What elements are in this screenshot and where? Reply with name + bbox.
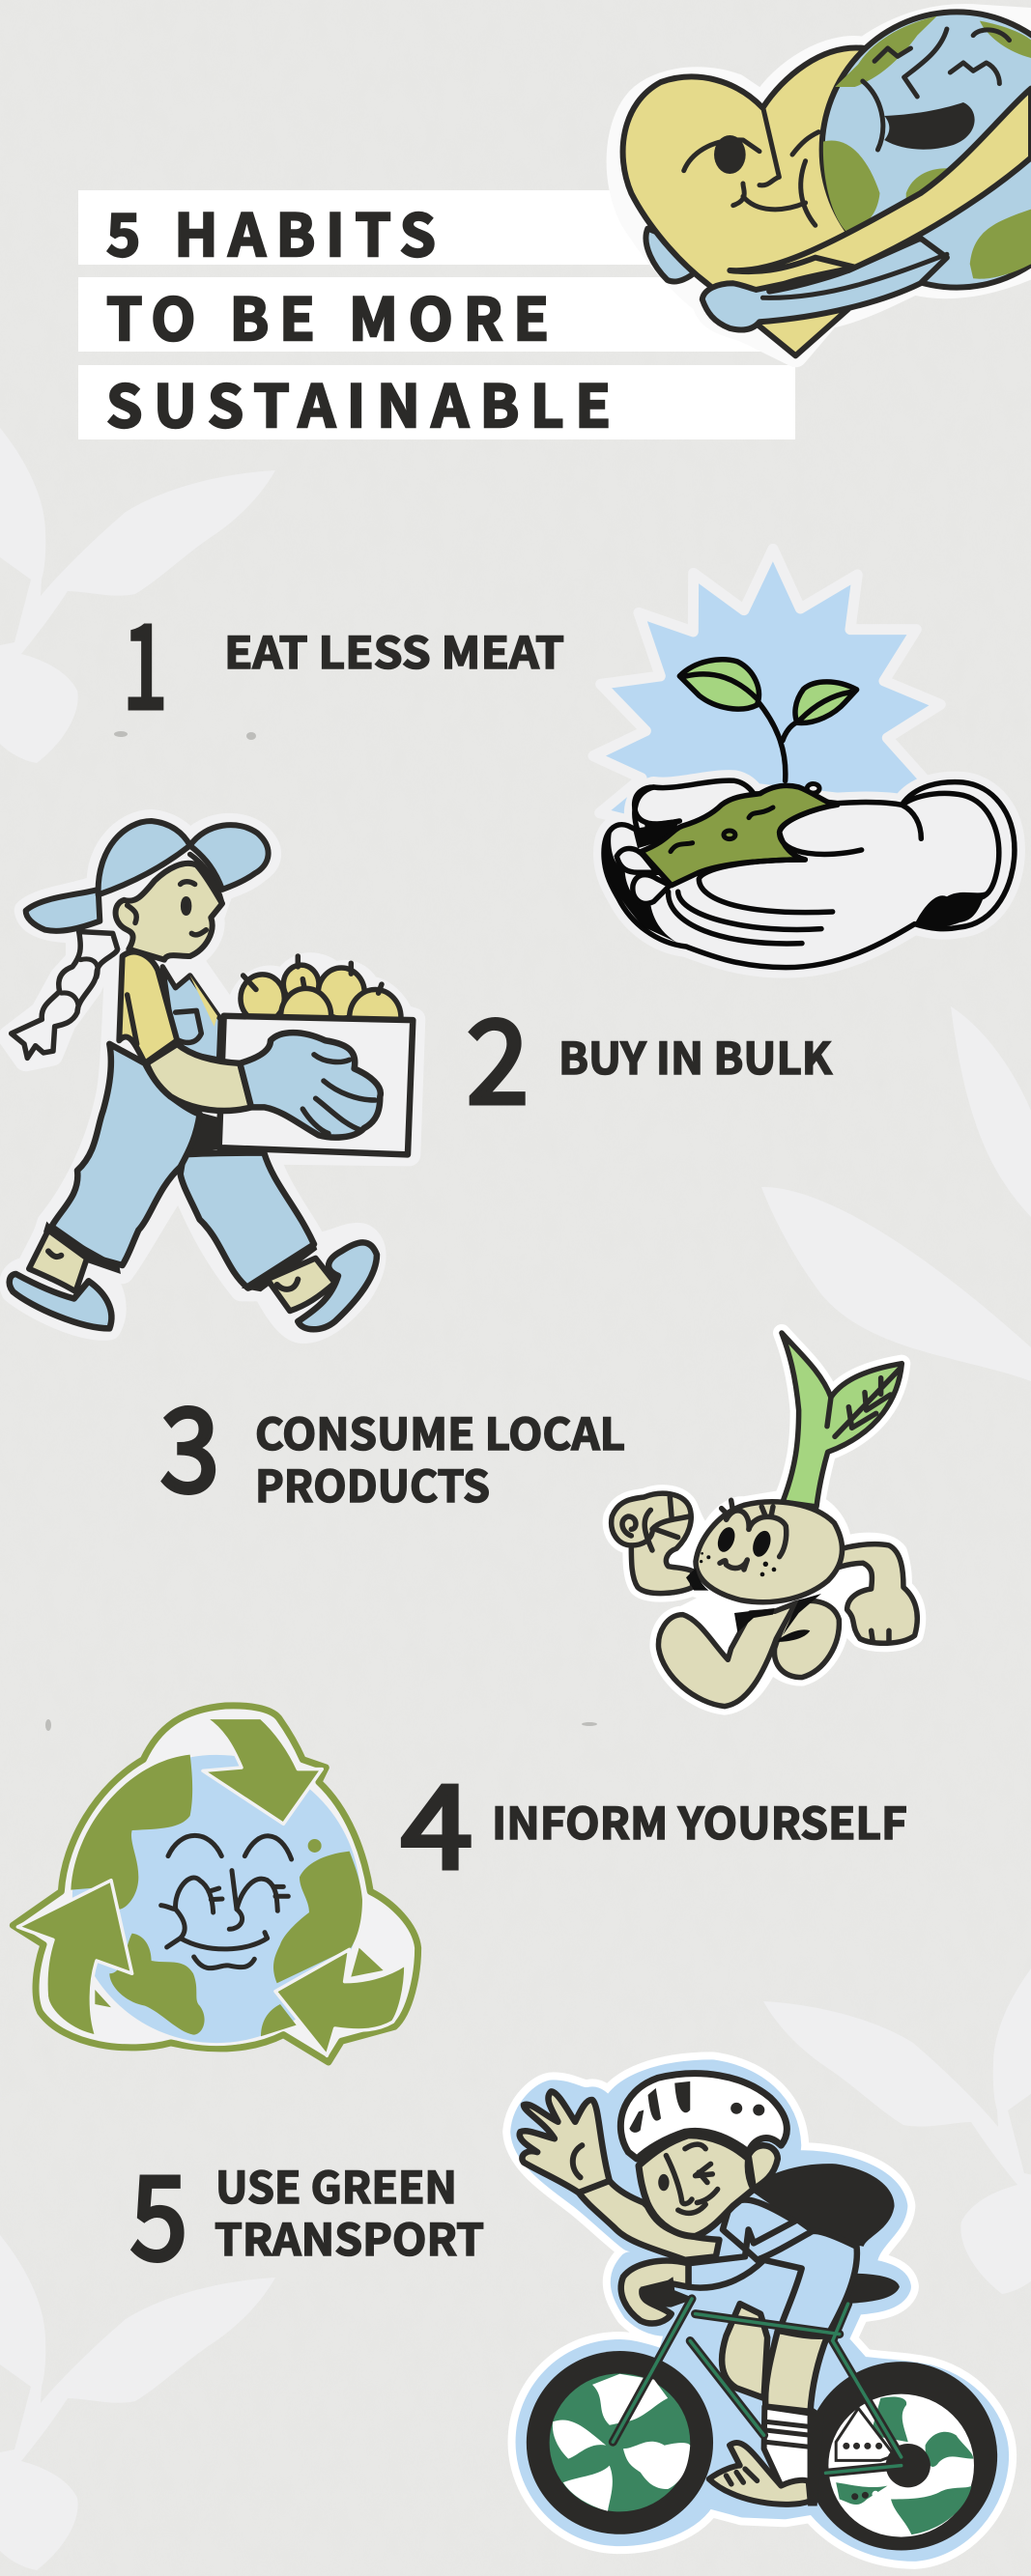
leg cuffs: [43, 1222, 317, 1291]
face: [116, 863, 222, 960]
step 5 label: TRANSPORT: [215, 2205, 484, 2268]
sock: [764, 2407, 811, 2486]
step 5 label: [130, 2127, 484, 2293]
waving hand: [520, 2091, 610, 2193]
foot: [709, 2443, 811, 2505]
step 3 label: PRODUCTS: [255, 1452, 490, 1514]
fingers: [616, 848, 670, 903]
sprout: [679, 660, 857, 780]
soil marks: [671, 807, 773, 852]
face: [686, 1500, 787, 1591]
front thigh: [765, 2331, 827, 2412]
ankles: [29, 1231, 335, 1311]
left shadow: [604, 831, 689, 948]
helmet: [620, 2074, 787, 2159]
saddle: [846, 2274, 900, 2304]
blue hugging arm and hand: [702, 239, 947, 330]
step 1 label: [123, 576, 564, 742]
fruit box: [219, 1016, 413, 1154]
step 4 label: INFORM YOURSELF: [492, 1789, 907, 1852]
right arm: [823, 1544, 917, 1643]
step 5 label: USE GREEN: [215, 2153, 457, 2216]
yellow hugging arm: [730, 89, 1031, 292]
step 2 label: 2: [467, 971, 529, 1137]
earth mouth: [884, 102, 975, 150]
illustration: heart hugging earth: [618, 12, 1031, 355]
step 3 label: 3: [160, 1359, 219, 1525]
step 1 label: 1: [123, 576, 167, 742]
planet: [71, 1753, 362, 2045]
waving arm: [579, 2181, 719, 2260]
ear: [749, 2145, 778, 2190]
face: [639, 2136, 754, 2236]
step 5 label: 5: [130, 2127, 187, 2293]
illustration: seedling in hands: [593, 549, 1015, 968]
face details: [128, 855, 222, 935]
continents: [71, 1755, 384, 2036]
heart face: [684, 106, 818, 225]
shirt and shorts: [688, 2199, 857, 2336]
title banner: 5 HABITS: [106, 189, 436, 273]
sticker halo: [10, 821, 414, 1332]
blue sticker halo: [522, 2071, 997, 2550]
front wheel: [527, 2351, 713, 2534]
braid: [12, 932, 118, 1058]
blue arm inner line: [762, 254, 947, 297]
overalls legs: [51, 1044, 314, 1288]
sticker halo: [612, 1333, 917, 1707]
fist: [612, 1493, 693, 1594]
title banner: SUSTAINABLE: [106, 360, 611, 444]
bicycle frame: [613, 2299, 902, 2473]
overalls chest: [162, 967, 220, 1060]
soil: [641, 785, 834, 886]
front leg: [658, 1603, 795, 1707]
step 4 label: 4: [401, 1736, 473, 1902]
outer badge: [13, 1706, 418, 2062]
heart body: [623, 48, 921, 355]
title banner: TO BE MORE: [106, 273, 549, 357]
back hand: [645, 229, 697, 281]
step 3 label: CONSUME LOCAL: [255, 1400, 625, 1462]
step 2 label: BUY IN BULK: [558, 1024, 833, 1087]
illustration: waving cyclist: [520, 2071, 997, 2551]
glove: [240, 1033, 381, 1138]
starburst: [593, 549, 940, 828]
body shadow: [182, 1113, 219, 1167]
step 1 label: EAT LESS MEAT: [224, 618, 564, 681]
arm: [147, 1044, 251, 1111]
white sticker edge: [522, 2071, 997, 2550]
back leg: [774, 1600, 839, 1678]
helmet vents: [629, 2081, 764, 2133]
illustration: farmer carrying fruit box: [10, 821, 414, 1332]
title banner: [78, 189, 795, 444]
pedal area: [836, 2408, 895, 2460]
earth globe: [822, 12, 1031, 288]
illustration: smiling earth with recycling arrows: [13, 1706, 418, 2062]
lower hand on handlebar: [621, 2261, 688, 2323]
hands outline: [604, 780, 1015, 968]
hand halo: [604, 780, 1015, 968]
oranges: [241, 956, 401, 1046]
step 3 label: [160, 1359, 625, 1525]
step 4 label: [401, 1736, 907, 1902]
wrist shadow: [915, 892, 986, 927]
face: [161, 1835, 292, 1968]
backpack: [749, 2164, 895, 2247]
leaf and stem: [782, 1333, 902, 1507]
head: [696, 1502, 843, 1602]
earth face lines: [863, 29, 1010, 150]
step 2 label: [467, 971, 833, 1137]
face details: [658, 2144, 718, 2213]
earth continents: [823, 16, 1031, 279]
recycling arrows: [17, 1717, 406, 2055]
illustration: running sprout character: [612, 1333, 917, 1707]
palm and thumb lines: [635, 787, 999, 944]
shirt sleeve: [119, 952, 177, 1063]
rear wheel: [805, 2362, 997, 2551]
shoes: [10, 1242, 377, 1329]
cap: [26, 821, 269, 931]
back thigh: [722, 2304, 767, 2398]
